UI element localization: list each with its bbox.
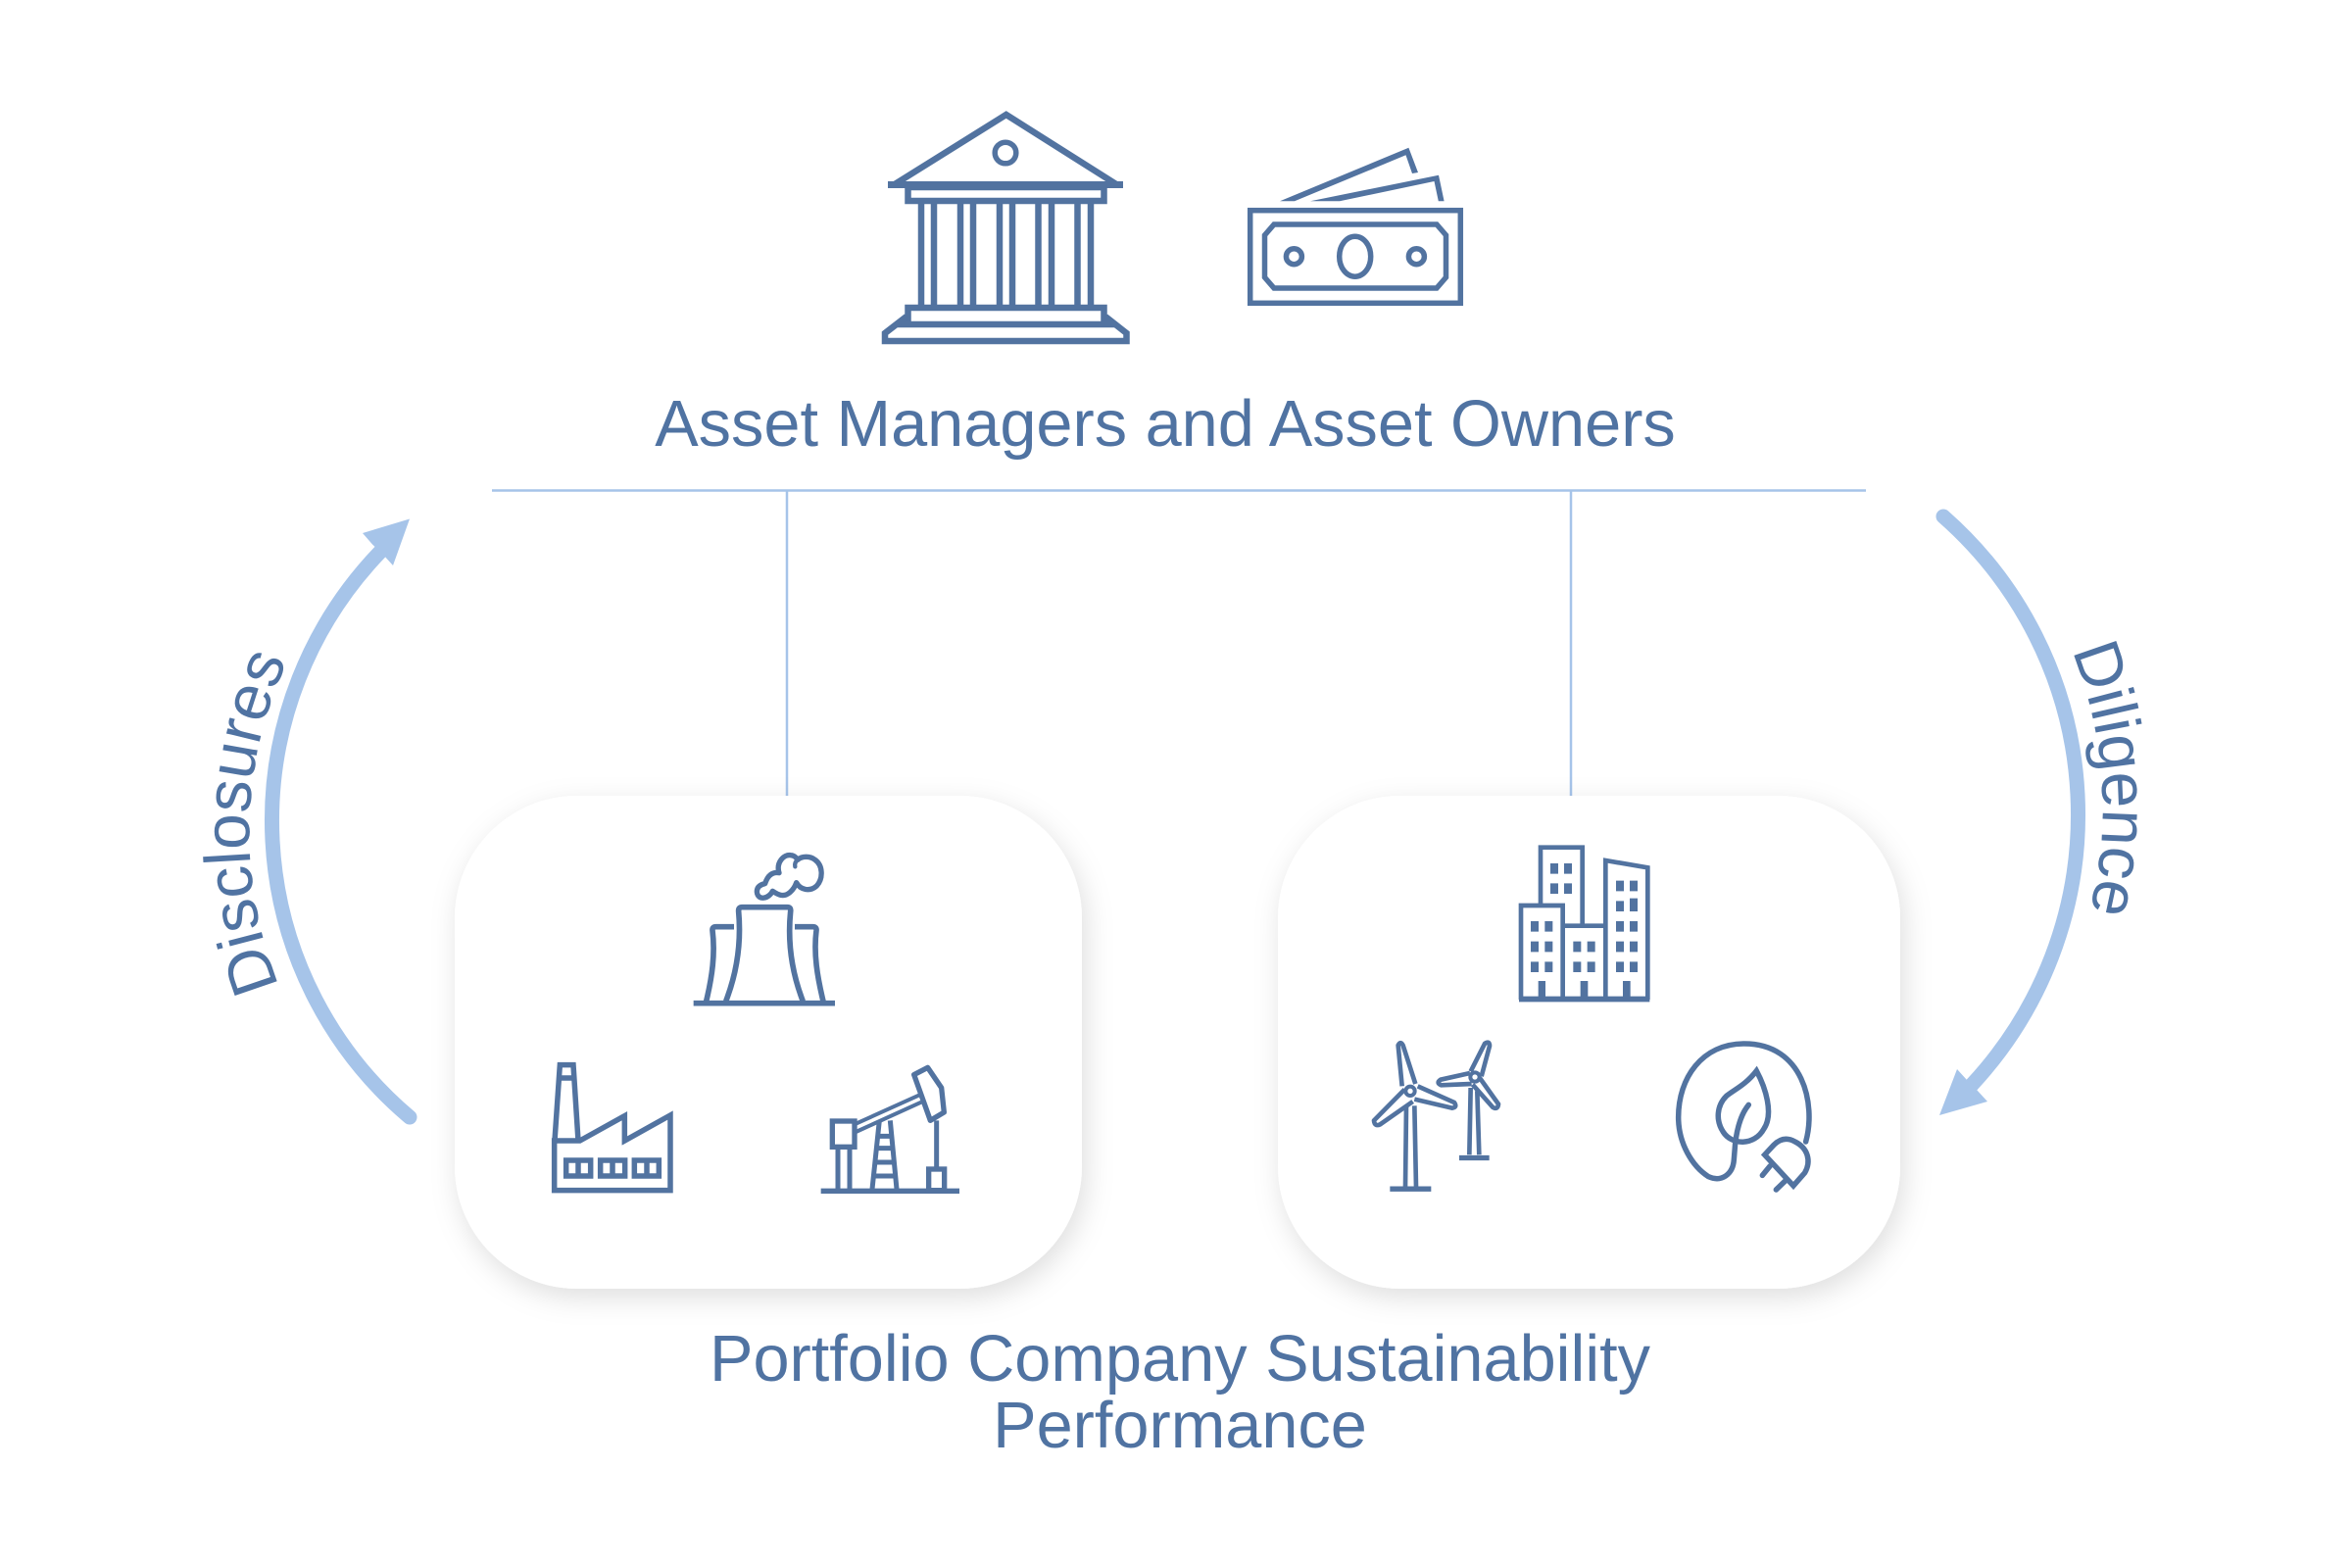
icon: bank building	[885, 115, 1127, 341]
label: disclosures: Disclosures	[203, 653, 284, 996]
panel: carbon-intensive portfolio companies	[455, 796, 1082, 1289]
icon: leaf with electric plug	[1679, 1044, 1809, 1190]
icon: cooling towers with smoke	[694, 856, 835, 1004]
connector lines	[492, 490, 1866, 796]
icon: city buildings	[1519, 848, 1649, 1000]
icon: wind turbines	[1374, 1043, 1498, 1189]
icon: banknotes	[1250, 148, 1460, 303]
arrow: diligence	[1939, 516, 2079, 1115]
panel: sustainable portfolio companies	[1278, 796, 1900, 1289]
label: diligence: Diligence	[2074, 641, 2142, 913]
icon: factory	[555, 1065, 670, 1191]
caption: portfolio company sustainability performance: Performance	[993, 1390, 1367, 1462]
arrow: disclosures	[271, 519, 410, 1117]
caption: portfolio company sustainability performance: Portfolio Company Sustainability	[710, 1323, 1651, 1396]
heading: asset managers and asset owners: Asset Managers and Asset Owners	[655, 388, 1676, 461]
icon: oil pumpjack	[821, 1067, 959, 1191]
